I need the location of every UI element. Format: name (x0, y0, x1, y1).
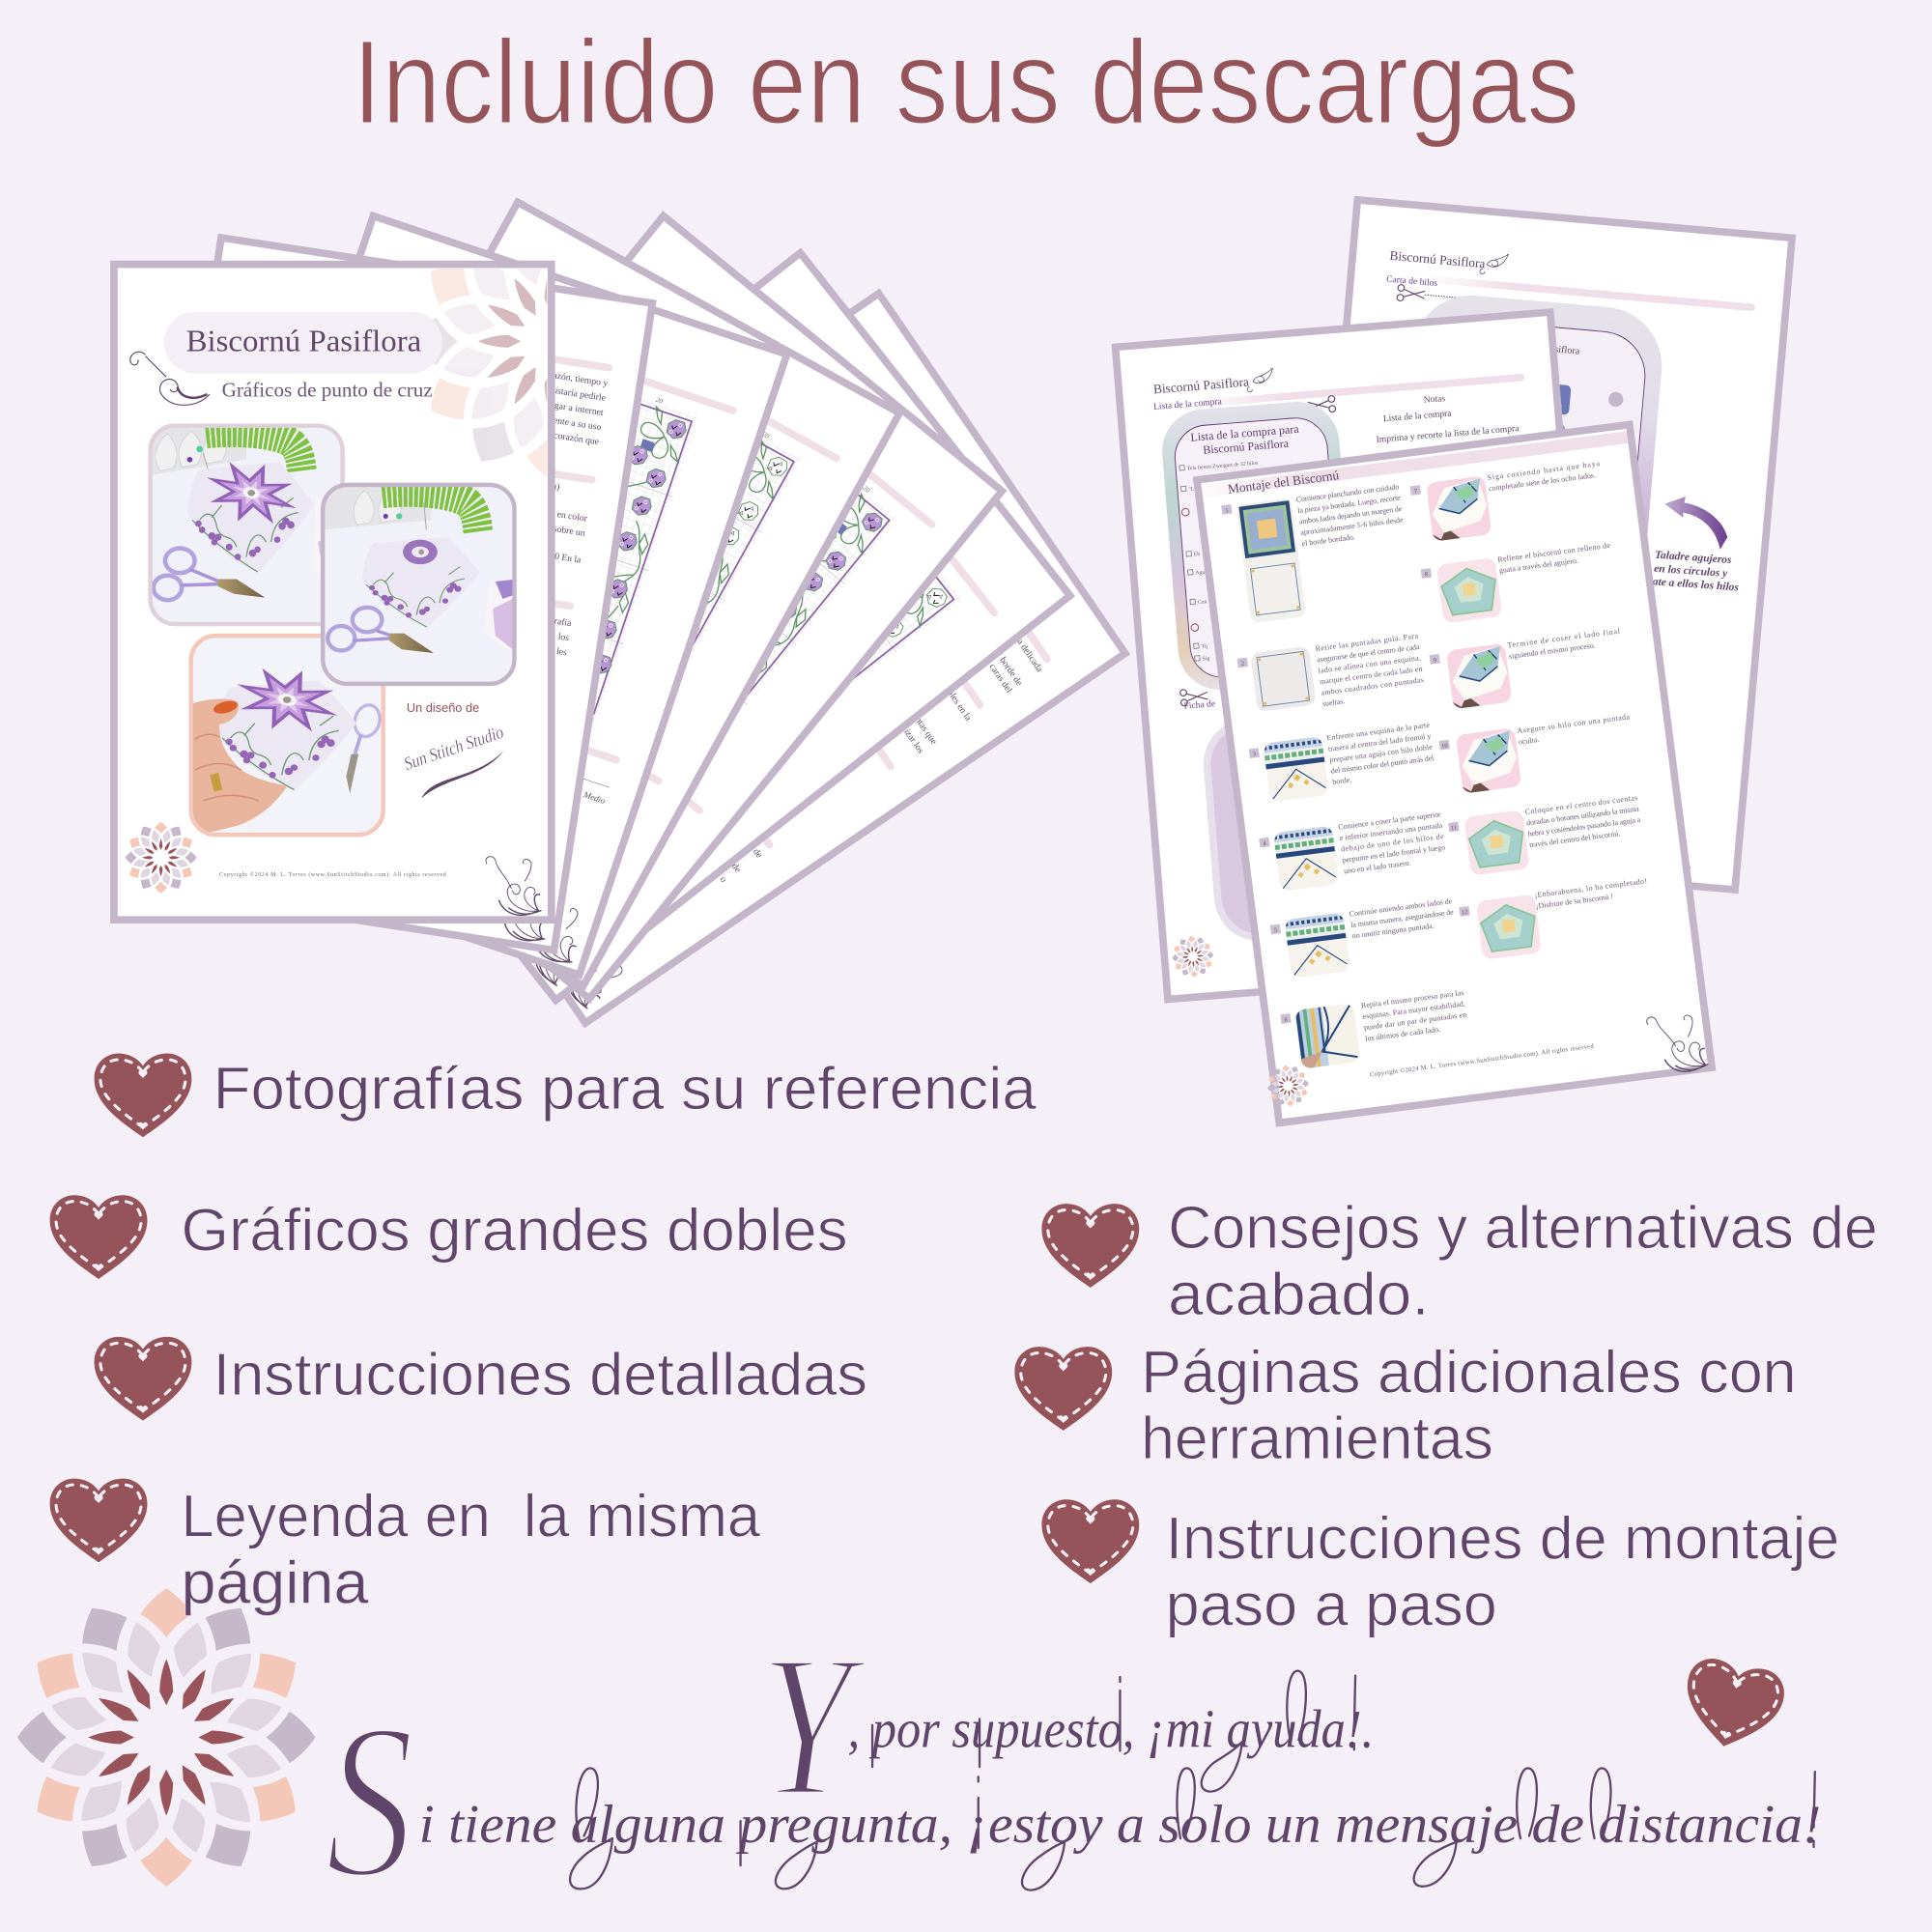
feature: finishing tips: Consejos y alternativas de (1168, 1194, 1878, 1262)
scissors (1179, 688, 1208, 706)
step 7: completado siete de los ocho lados. (1488, 470, 1596, 493)
step 11: doradas o botones utilizando la misma (1526, 804, 1640, 827)
notes text (1373, 387, 1520, 445)
notes text: Notas (1423, 393, 1446, 406)
shopping list card: Lista de la compra para (1190, 422, 1300, 444)
notes text: Imprima y recorte la lista de la compra (1376, 423, 1520, 445)
step 1: ambos lados dejando un margen de (1298, 504, 1403, 526)
step 8: 8 (1425, 571, 1429, 579)
photo 3: biscornu in hand (188, 634, 385, 838)
page 6: text page: o (718, 874, 729, 885)
heading: Biscornú Pasiflora (1389, 248, 1486, 270)
feature: large charts (50, 1195, 848, 1279)
step 7 (1409, 459, 1607, 544)
step 11 (1447, 793, 1645, 878)
step 1: Comience planchando con cuidado (1295, 482, 1400, 504)
large mandala (17, 1588, 316, 1887)
step 10: oculta. (1518, 735, 1540, 747)
feature: extra pages: Páginas adicionales con (1141, 1338, 1797, 1406)
band (1434, 276, 1755, 311)
step 1: 1 (1225, 507, 1229, 514)
thread card: Pasiflora (1545, 343, 1580, 357)
step 11: hebra y cosiéndolos pasando la aguja a (1527, 815, 1641, 838)
page 6: text page: la delicada (1013, 635, 1045, 674)
scissors line (1397, 284, 1460, 306)
step 12 (1458, 876, 1655, 962)
step 3: borde. (1332, 775, 1352, 786)
step 6: Repita el mismo proceso para las (1360, 988, 1464, 1009)
page: shopping list (Lista de la compra) (1116, 312, 1603, 999)
feature: legend (50, 1479, 760, 1562)
step 5: Continúe uniendo ambos lados de (1349, 896, 1453, 919)
drill note: en los círculos y (1654, 563, 1729, 580)
step 1: la pieza ya bordada. Luego, recorte (1297, 493, 1402, 515)
step 8 (1420, 541, 1618, 626)
page 1: introduction text: llegar a internet (545, 399, 605, 418)
step 11: través del centro del biscornú. (1529, 829, 1621, 849)
note text: ujeros en los (1620, 763, 1668, 778)
fan of chart pages (123, 202, 1125, 1023)
step 12: ¡Disfrute de su biscornú ! (1535, 892, 1614, 911)
swirl (1634, 825, 1694, 888)
page 6: text page (339, 294, 1125, 1023)
step 10: 10 (1441, 743, 1448, 750)
step 6: 6 (1284, 1016, 1288, 1024)
step 3: Enfrente una esquina de la parte (1326, 721, 1431, 742)
step 4 (1259, 810, 1449, 894)
page 1: introduction text: rafía (554, 616, 573, 629)
shopping list card: Biscornú Pasiflora (1203, 437, 1290, 457)
step 4: Comience a coser la parte superior (1338, 810, 1442, 832)
page 1: introduction text: corazón, tiempo y (540, 368, 609, 389)
feature: large charts: Gráficos grandes dobles (182, 1197, 848, 1264)
step 6: los últimos de cada lado. (1365, 1025, 1441, 1043)
page 6: text page: caras del (987, 662, 1014, 696)
page 1: introduction text (123, 238, 652, 951)
cover small mandala (126, 822, 197, 894)
shopping list card: Agu (1195, 570, 1206, 577)
feature: photographs: Fotografías para su referencia (213, 1055, 1037, 1122)
drill note: ate a ellos los hilos (1652, 576, 1740, 594)
step 11: 11 (1451, 825, 1458, 832)
script line 1: , por supuesto, ¡mi ayuda!. (848, 1700, 1374, 1760)
step 2: 2 (1240, 661, 1245, 668)
photo 1: biscornu with star (148, 421, 350, 629)
step 9: siguiendo el mismo proceso. (1508, 640, 1596, 661)
step 9: Termine de coser el lado final (1507, 626, 1621, 649)
step 2 (1236, 631, 1426, 718)
drill note (1652, 550, 1740, 594)
subheading: Carta de hilos (1386, 274, 1438, 289)
heading: Montaje del Biscornú (1227, 468, 1340, 497)
page 1: introduction text: en color (556, 509, 588, 525)
step 4: uno en el lado trasero. (1344, 858, 1411, 875)
cover mandala watermark (431, 269, 547, 477)
title: Incluido en sus descargas (353, 16, 1579, 150)
shopping list card (1159, 399, 1358, 693)
band (1203, 374, 1524, 407)
feature: photographs (95, 1054, 1037, 1137)
page 6: text page: l borde de (994, 651, 1024, 688)
script line 2: S (326, 1677, 414, 1923)
script line 2 (326, 1677, 1821, 1923)
step 1: aproximadamente 5-6 hilos desde (1300, 515, 1405, 537)
page copyright: Copyright ©2024 M. L. Torres (www.SunStitchStudio.com). All rights reserved (1370, 1043, 1595, 1078)
step 6: esquinas. Para mayor estabilidad, (1362, 999, 1465, 1021)
feature: detailed instructions (95, 1337, 867, 1421)
page 1: introduction text: mente a su uso (546, 414, 602, 433)
notes text: Lista de la compra (1382, 409, 1453, 424)
cover flourish (130, 352, 210, 405)
page 2: chart: Medio (582, 789, 607, 806)
page 1: introduction text: la) (549, 481, 560, 493)
step 3: 3 (1252, 751, 1257, 758)
shopping list card: "Lugana" (1188, 485, 1209, 493)
feature: extra pages (1014, 1338, 1797, 1472)
feature: finishing tips: acabado. (1168, 1261, 1430, 1328)
cover copyright: Copyright ©2024 M. L. Torres (www.SunStitchStudio.com). All rights reserved (219, 871, 446, 878)
step 6 (1280, 988, 1471, 1071)
step 5: 5 (1274, 927, 1278, 934)
page: thread chart (Carta de hilos) (1300, 200, 1792, 892)
script line 2: i tiene alguna pregunta, ¡estoy a solo un mensaje de distancia! (419, 1795, 1821, 1855)
designer signature (402, 723, 506, 799)
feature: assembly steps: paso a paso (1166, 1571, 1497, 1638)
tilted heart (1676, 1654, 1789, 1756)
page 4: chart (251, 215, 1002, 999)
script line 1: Y (760, 1612, 867, 1838)
step 4: debajo de uno de los hilos de (1341, 832, 1445, 854)
step 9 (1429, 626, 1628, 711)
section label: Ficha de (1183, 698, 1215, 712)
step 4: 4 (1263, 840, 1267, 847)
page 6: text page: lizar los (900, 724, 925, 755)
thread photo card (1204, 713, 1380, 941)
shopping list card: Tela lienzo Zweigart de 32 hilos (1187, 461, 1259, 471)
feature: legend: Leyenda en la misma (182, 1483, 760, 1550)
page 1: introduction text: sobre un (553, 524, 586, 539)
cover title pill (164, 312, 442, 373)
step 10 (1438, 712, 1637, 796)
step 2: ambos cuadrados con puntadas (1321, 675, 1424, 697)
step 2: sueltas. (1321, 696, 1346, 708)
step 8: guata a través del agujero. (1498, 556, 1578, 575)
shopping list card: Eb (1194, 552, 1201, 557)
step 9: 9 (1433, 657, 1436, 664)
step 2: asegurarse de que el centro de cada (1317, 642, 1420, 664)
step 3 (1248, 721, 1437, 804)
drill note: Taladre agujeros (1655, 550, 1732, 566)
step 7: Siga cosiendo hasta que haya (1487, 459, 1601, 482)
shopping list card: Sig (1202, 656, 1210, 663)
page 1: introduction text: corazón que (554, 430, 600, 447)
page 6: text page: de (729, 862, 743, 875)
step 5: la misma manera, asegurándose de (1350, 907, 1455, 929)
step 8: Rellene el biscornú con relleno de (1497, 541, 1611, 564)
cover page (110, 261, 555, 923)
heading: Biscornú Pasiflora (1152, 374, 1249, 396)
page 6: text page: de (751, 847, 764, 860)
heading flourish (1246, 368, 1274, 392)
step 2: marque el centro de cada lado en (1319, 665, 1423, 686)
page 1: introduction text: los (557, 632, 570, 643)
step 11: Coloque en el centro dos cuentas (1524, 793, 1638, 816)
step 4: e inferior insertando una puntada (1339, 821, 1443, 842)
step 3: del mismo color del punto atrás del (1330, 753, 1435, 776)
step 2: lado se alinea con una esquina, (1318, 653, 1421, 675)
band (1202, 431, 1628, 497)
page swirl (1646, 1010, 1708, 1076)
feature: assembly steps (1041, 1499, 1839, 1638)
cover title: Biscornú Pasiflora (186, 325, 421, 358)
page 5: chart (286, 253, 1070, 1000)
shopping list card: Con (1198, 599, 1208, 606)
page 1: introduction text: gustaría pedirle (548, 384, 607, 404)
step 6: puede dar un par de puntadas en (1363, 1010, 1467, 1032)
step 12: 12 (1462, 909, 1468, 917)
small mandala (1171, 934, 1215, 979)
script line 1 (760, 1612, 1374, 1838)
page mandala (1264, 1063, 1312, 1109)
step 3: trasera al centro del lado frontal y (1327, 731, 1432, 753)
scissors line (1279, 395, 1336, 416)
designer signature: Sun Stitch Studio (402, 723, 506, 775)
photo 2: biscornu top view (321, 483, 518, 688)
feature: assembly steps: Instrucciones de montaje (1166, 1505, 1839, 1573)
step 10: Asegure su hilo con una puntada (1517, 712, 1631, 735)
page 1: introduction text: les (555, 646, 568, 658)
page 1: introduction text: 0 En la (554, 552, 582, 566)
thread card (1373, 291, 1666, 828)
cover swirl (486, 857, 541, 915)
feature: legend, second line: página (182, 1548, 369, 1616)
page: assembly instructions (Montaje del Biscornú) (1189, 425, 1712, 1124)
subheading: Lista de la compra (1153, 396, 1223, 412)
page 3: chart (202, 202, 899, 985)
step 7: 7 (1414, 488, 1418, 496)
page 6: text page: bles en la (945, 688, 974, 724)
step 1 (1221, 482, 1414, 625)
step 4: perpunte en el lado frontal y luego (1342, 842, 1446, 865)
heading flourish (1480, 251, 1509, 276)
step 2: Retire las puntadas guía. Para (1315, 631, 1419, 653)
page 6: text page: ntas que (913, 715, 939, 747)
step 5 (1269, 896, 1460, 980)
step 3: prepare una aguja con hilo doble (1329, 743, 1434, 764)
page 2: chart (165, 216, 787, 975)
step 12: ¡Enhorabuena, lo ha completado! (1534, 876, 1647, 899)
arrow to circles (1664, 497, 1727, 550)
designer credit: Un diseño de (407, 700, 479, 715)
feature: detailed instructions: Instrucciones detalladas (213, 1341, 867, 1408)
step 5: no omitir ninguna puntada. (1351, 922, 1435, 940)
script flourishes (570, 1671, 1815, 1890)
cover subtitle: Gráficos de punto de cruz (222, 379, 433, 402)
feature: finishing tips (1041, 1194, 1878, 1328)
step 1: el borde bordado. (1301, 532, 1355, 548)
shopping list card: Tij (1201, 643, 1208, 650)
feature: extra pages: herramientas (1141, 1405, 1493, 1472)
